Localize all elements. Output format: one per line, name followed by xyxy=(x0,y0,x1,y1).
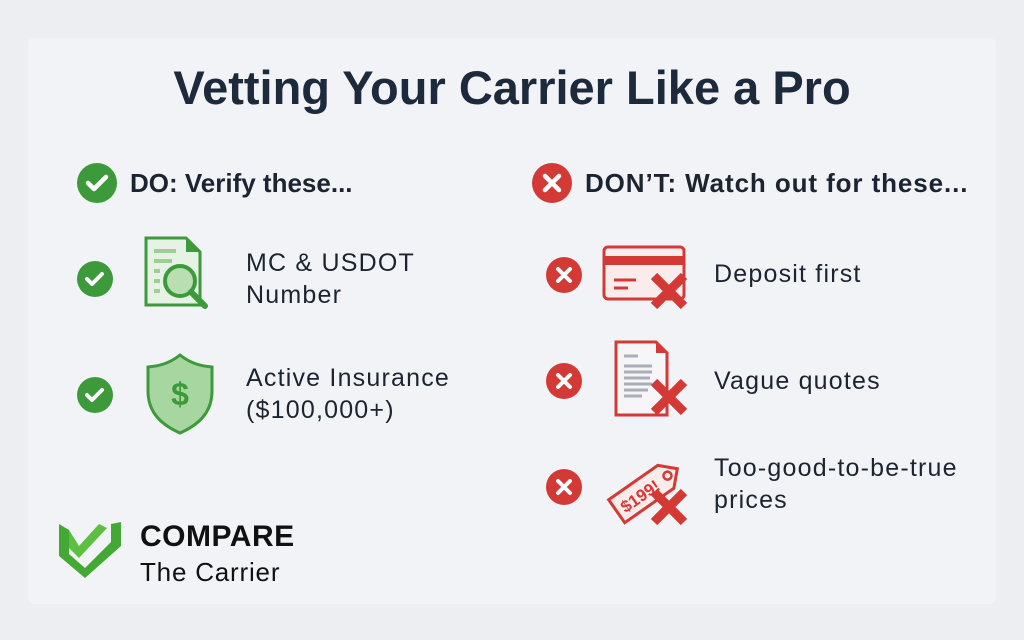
icon: price tag with x: $199! xyxy=(617,476,664,517)
icon: shield dollar: $ xyxy=(171,376,189,412)
heading: DON'T xyxy=(532,163,968,203)
logo: COMPARE xyxy=(140,520,295,553)
row: Active Insurance xyxy=(77,353,450,435)
row: Too-good-to-be-true prices xyxy=(546,454,958,526)
row: MC & USDOT xyxy=(77,236,415,309)
row: Active Insurance: ($100,000+) xyxy=(246,396,395,424)
row: Too-good-to-be-true prices: prices xyxy=(714,486,788,514)
row: Vague quotes xyxy=(546,340,881,416)
row: MC & USDOT: Number xyxy=(246,281,342,309)
icon: price tag with x xyxy=(606,464,688,526)
heading: DO: DO: Verify these... xyxy=(130,168,353,198)
icon: shield dollar xyxy=(146,353,214,435)
row: Deposit first: Deposit first xyxy=(714,260,862,288)
heading: DO xyxy=(77,163,353,203)
row: Deposit first xyxy=(546,246,862,310)
logo: The Carrier xyxy=(140,557,280,587)
row: Active Insurance: Active Insurance xyxy=(246,364,450,392)
title: Vetting Your Carrier Like a Pro xyxy=(173,61,851,114)
row: MC & USDOT: MC & USDOT xyxy=(246,249,415,277)
logo xyxy=(59,520,295,587)
row: Vague quotes: Vague quotes xyxy=(714,367,881,395)
icon: doc with x xyxy=(614,340,688,416)
icon: document magnifier xyxy=(144,236,208,309)
icon: card with x xyxy=(602,246,688,310)
heading: DON'T: DON’T: Watch out for these... xyxy=(585,168,968,198)
row: Too-good-to-be-true prices: Too-good-to-be-true xyxy=(714,454,958,482)
